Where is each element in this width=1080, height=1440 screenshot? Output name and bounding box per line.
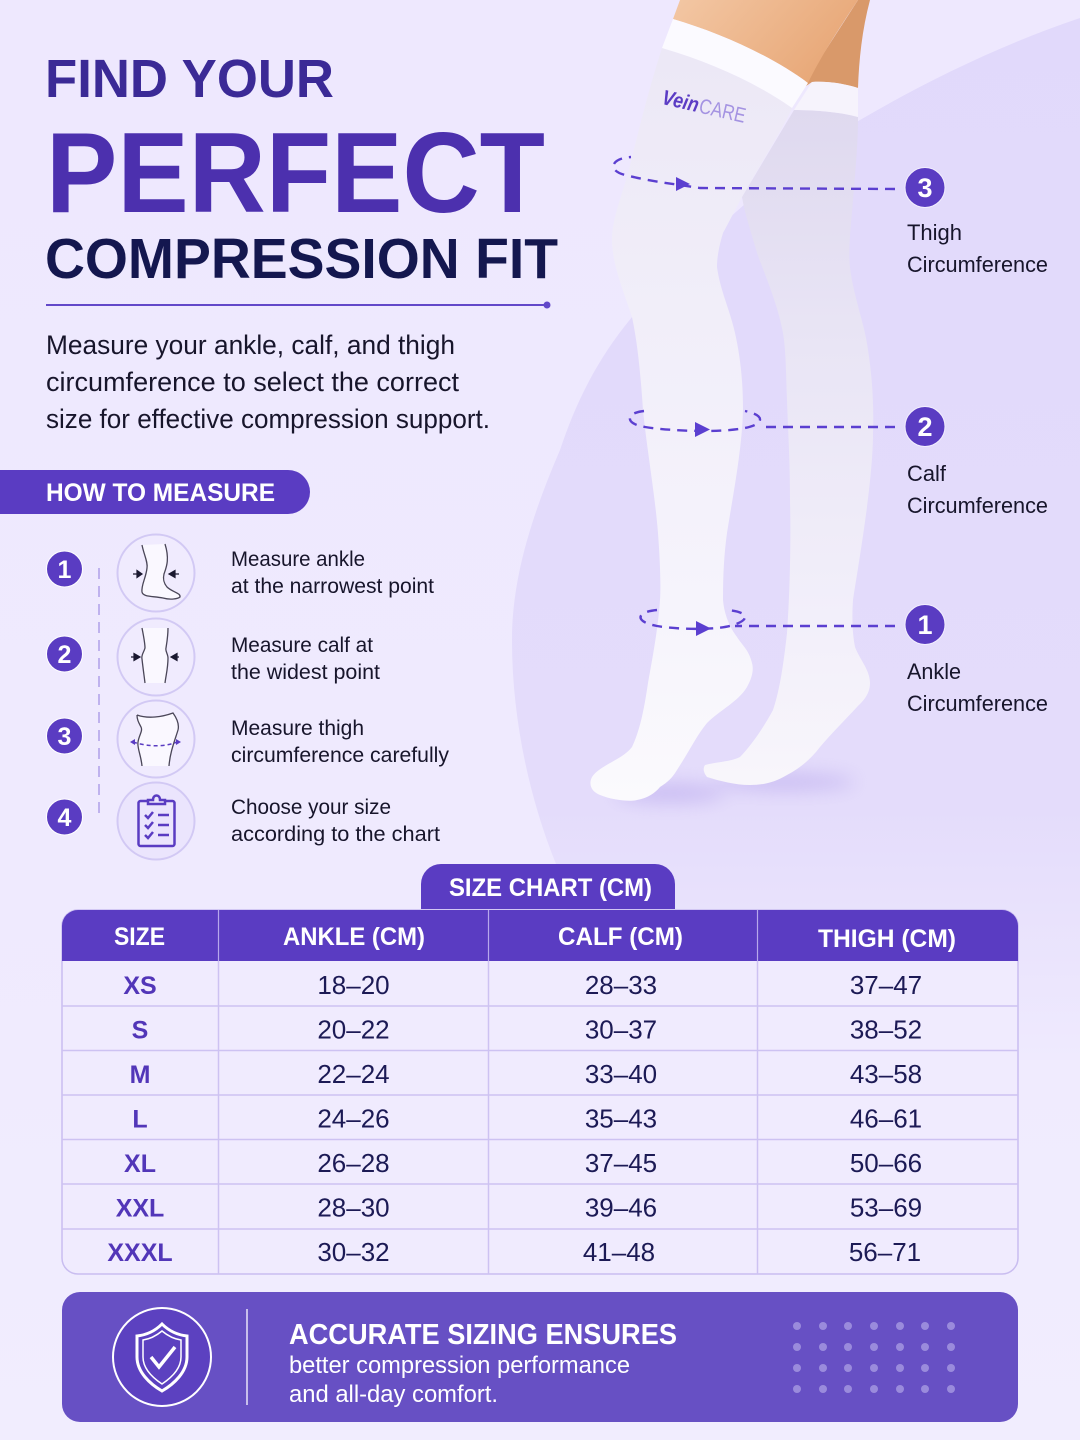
brand logo [660, 86, 748, 128]
ankle values: 18–20 [317, 970, 390, 1000]
ankle values [317, 970, 390, 1267]
thigh values: 56–71 [849, 1237, 921, 1267]
intro text [46, 330, 490, 434]
ankle values: 28–30 [317, 1192, 390, 1222]
size labels: M [130, 1061, 150, 1089]
calf values: 28–33 [585, 970, 657, 1000]
size labels: XXXL [107, 1239, 173, 1267]
icon: thigh [118, 700, 194, 778]
table header: CALF (CM) [558, 923, 683, 951]
banner text: better compression performance [289, 1352, 630, 1379]
thigh measurement guide [613, 157, 895, 191]
step 2 text [231, 634, 380, 684]
ankle values: 26–28 [317, 1148, 390, 1178]
size labels: L [132, 1106, 148, 1134]
badge 2: 2 [58, 641, 71, 669]
brand logo: Vein [660, 86, 701, 117]
intro text: Measure your ankle, calf, and thigh [46, 330, 455, 360]
callout: thigh circumference: Thigh [907, 220, 962, 245]
callout: calf circumference [905, 406, 1048, 518]
calf values: 37–45 [585, 1148, 657, 1178]
legs illustration [590, 0, 873, 802]
step 4 text: according to the chart [231, 823, 440, 846]
step connector [98, 568, 100, 818]
ankle values: 20–22 [317, 1014, 390, 1044]
step 3 [46, 700, 450, 778]
banner text: and all-day comfort. [289, 1381, 498, 1408]
table header: SIZE [114, 923, 165, 951]
thigh values: 43–58 [850, 1059, 922, 1089]
size chart table [62, 910, 1018, 1274]
step 1 text: Measure ankle [231, 548, 365, 571]
front leg skin [673, 0, 858, 83]
ankle measurement guide [640, 610, 895, 636]
calf measurement guide [630, 411, 895, 437]
callout: calf circumference: Calf [907, 461, 947, 486]
icon: ankle [118, 534, 194, 612]
callout: calf circumference: 2 [917, 412, 933, 442]
calf values: 41–48 [583, 1237, 655, 1267]
ankle values: 24–26 [317, 1104, 390, 1134]
size chart tab: SIZE CHART (CM) [449, 874, 652, 902]
brand logo: CARE [697, 95, 748, 128]
callout: ankle circumference: 1 [917, 610, 933, 640]
step 1 text [231, 548, 434, 598]
ankle values: 30–32 [317, 1237, 390, 1267]
step 4 text: Choose your size [231, 796, 391, 819]
step 4 text [231, 796, 440, 846]
size labels: S [132, 1016, 148, 1044]
calf values: 39–46 [585, 1192, 657, 1222]
callout: ankle circumference: Ankle [907, 659, 961, 684]
callout: calf circumference: Circumference [907, 493, 1048, 518]
size labels: XL [124, 1150, 156, 1178]
thigh values: 38–52 [850, 1014, 922, 1044]
icon: calf [118, 618, 194, 696]
dot pattern [793, 1322, 955, 1393]
step 2 text: the widest point [231, 661, 380, 684]
title underline [46, 302, 550, 308]
step 3 text: Measure thigh [231, 717, 364, 740]
back leg band [794, 82, 858, 117]
banner text: ACCURATE SIZING ENSURES [289, 1319, 677, 1351]
table header: THIGH (CM) [818, 925, 956, 953]
thigh values: 46–61 [850, 1104, 922, 1134]
badge 2 [46, 636, 82, 672]
icon: clipboard checklist [118, 782, 194, 860]
ankle values: 22–24 [317, 1059, 390, 1089]
how to measure banner: HOW TO MEASURE [46, 479, 275, 507]
size labels: XXL [116, 1194, 164, 1222]
back leg skin [800, 0, 870, 90]
table body [62, 910, 1018, 1274]
calf values [583, 970, 657, 1267]
back leg stocking [704, 110, 873, 785]
calf values: 35–43 [585, 1104, 657, 1134]
size chart tab [421, 864, 675, 909]
icon: shield with check [113, 1308, 211, 1406]
floor shadows [615, 774, 855, 802]
badge 1: 1 [58, 556, 72, 584]
callout: thigh circumference [905, 168, 1048, 277]
intro text: circumference to select the correct [46, 367, 459, 397]
front leg stocking [590, 48, 792, 801]
callout: thigh circumference: Circumference [907, 252, 1048, 277]
step 3 text: circumference carefully [231, 744, 450, 767]
step 2 text: Measure calf at [231, 634, 373, 657]
heading line: find your: FIND YOUR [45, 49, 334, 109]
calf values: 33–40 [585, 1059, 657, 1089]
badge 1 [46, 551, 82, 587]
banner text [289, 1319, 677, 1408]
step 3 text [231, 717, 450, 767]
badge 3: 3 [58, 723, 71, 751]
heading line: compression fit: COMPRESSION FIT [45, 227, 558, 291]
size labels [107, 972, 173, 1267]
step 4 [46, 782, 440, 860]
callout: thigh circumference: 3 [917, 173, 933, 203]
front leg band [662, 19, 808, 108]
table grid [62, 961, 1018, 1274]
size labels: XS [123, 972, 157, 1000]
badge 3 [46, 718, 82, 754]
calf values: 30–37 [585, 1014, 657, 1044]
callout: ankle circumference: Circumference [907, 691, 1048, 716]
step 2 [46, 618, 380, 696]
title [45, 49, 558, 291]
callout: ankle circumference [905, 604, 1048, 716]
badge 4 [46, 799, 82, 835]
intro text: size for effective compression support. [46, 404, 490, 434]
table header [62, 910, 1018, 961]
thigh values: 53–69 [850, 1192, 922, 1222]
how to measure banner [0, 470, 310, 514]
thigh values: 37–47 [850, 970, 922, 1000]
bottom callout banner [62, 1292, 1018, 1422]
thigh values [849, 970, 922, 1267]
badge 4: 4 [58, 804, 72, 832]
thigh values: 50–66 [850, 1148, 922, 1178]
table header: ANKLE (CM) [283, 923, 425, 951]
step 1 text: at the narrowest point [231, 575, 434, 598]
step 1 [46, 534, 434, 612]
heading line: perfect: PERFECT [46, 110, 545, 237]
